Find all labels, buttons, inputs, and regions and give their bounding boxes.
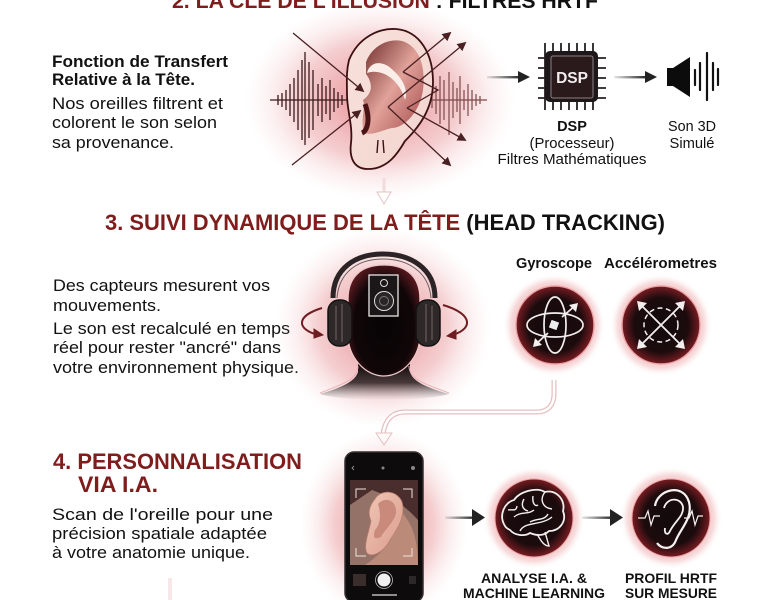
text block: personalisation: à votre anatomie unique.: [52, 543, 250, 562]
ear shape: [347, 29, 433, 169]
headband: [333, 254, 435, 298]
text: 3D sound caption: [668, 119, 716, 152]
scanned ear: [366, 492, 403, 555]
illustration: phone scanning ear: [300, 430, 468, 600]
text block: head tracking: réel pour rester "ancré" dans: [53, 338, 281, 357]
waveform: left: [270, 52, 352, 145]
text block: HRTF definition: Relative à la Tête.: [52, 70, 195, 89]
scan frame corners: [356, 489, 412, 556]
head: [348, 265, 420, 376]
illustration: head with headphones: [275, 228, 491, 428]
text block: head tracking: [53, 276, 299, 377]
icon: brain disc: [489, 473, 579, 563]
arrow: phone to brain: [445, 509, 485, 526]
icon: DSP chip: DSP: [556, 70, 588, 87]
arrows in and out: [292, 33, 465, 165]
arrow: DSP to 3D sound: [614, 71, 657, 83]
arrow: section 2 to section 3: [377, 178, 391, 204]
heading: section 4: 4. PERSONNALISATION: [53, 449, 302, 474]
text: AI analysis caption: [463, 570, 605, 600]
text block: head tracking: Le son est recalculé en temps: [53, 319, 290, 338]
label: accelerometers: Accélérometres: [604, 256, 717, 272]
camera controls: [378, 574, 390, 586]
ear cups: [328, 300, 352, 346]
illustration: ear with sound waves and arrows: [245, 0, 515, 200]
text block: HRTF definition: colorent le son selon: [52, 113, 217, 132]
speaker on head: [369, 275, 398, 316]
text block: head tracking: mouvements.: [53, 296, 161, 315]
text: DSP caption: Filtres Mathématiques: [498, 152, 646, 168]
text: DSP caption: [498, 119, 646, 168]
heading: section 4: [53, 449, 302, 497]
text block: personalisation: [52, 505, 273, 562]
neck and shoulders: [320, 362, 449, 400]
text block: HRTF definition: [52, 52, 228, 152]
text block: personalisation: Scan de l'oreille pour une: [52, 505, 273, 524]
text block: HRTF definition: sa provenance.: [52, 133, 174, 152]
text block: head tracking: Des capteurs mesurent vos: [53, 276, 270, 295]
ear inner: [363, 40, 424, 134]
text block: HRTF definition: Fonction de Transfert: [52, 52, 228, 71]
text: DSP caption: (Processeur): [530, 136, 614, 152]
arrow: section 3 to section 4: [376, 380, 554, 445]
text block: HRTF definition: Nos oreilles filtrent et: [52, 94, 223, 113]
text: DSP caption: DSP: [557, 119, 587, 135]
text: 3D sound caption: Son 3D: [668, 119, 716, 135]
text: 3D sound caption: Simulé: [670, 136, 714, 152]
arrow: brain to ear profile: [582, 509, 623, 526]
text block: personalisation: précision spatiale adaptée: [52, 524, 267, 543]
heading: section 3: 3. SUIVI DYNAMIQUE DE LA TÊTE (HEAD TRACKING): [105, 210, 665, 235]
rotation arrows: [302, 308, 322, 335]
arrow: ear to DSP: [487, 71, 530, 83]
heading: section 4: VIA I.A.: [78, 472, 158, 497]
text block: head tracking: votre environnement physique.: [53, 358, 299, 377]
icon: ear profile disc: [626, 473, 716, 563]
icon: speaker with waves: [667, 53, 718, 100]
label: gyroscope: Gyroscope: [516, 256, 592, 272]
waveform: right: [425, 72, 487, 135]
text: AI analysis caption: ANALYSE I.A. &: [481, 570, 587, 586]
arrow: continuing downward: [168, 578, 172, 600]
text: HRTF profile caption: PROFIL HRTF: [625, 570, 717, 586]
icon: DSP chip: [538, 43, 606, 110]
icon: gyroscope disc: [509, 280, 599, 370]
icon: accelerometer disc: [616, 280, 706, 370]
text: HRTF profile caption: [625, 570, 717, 600]
